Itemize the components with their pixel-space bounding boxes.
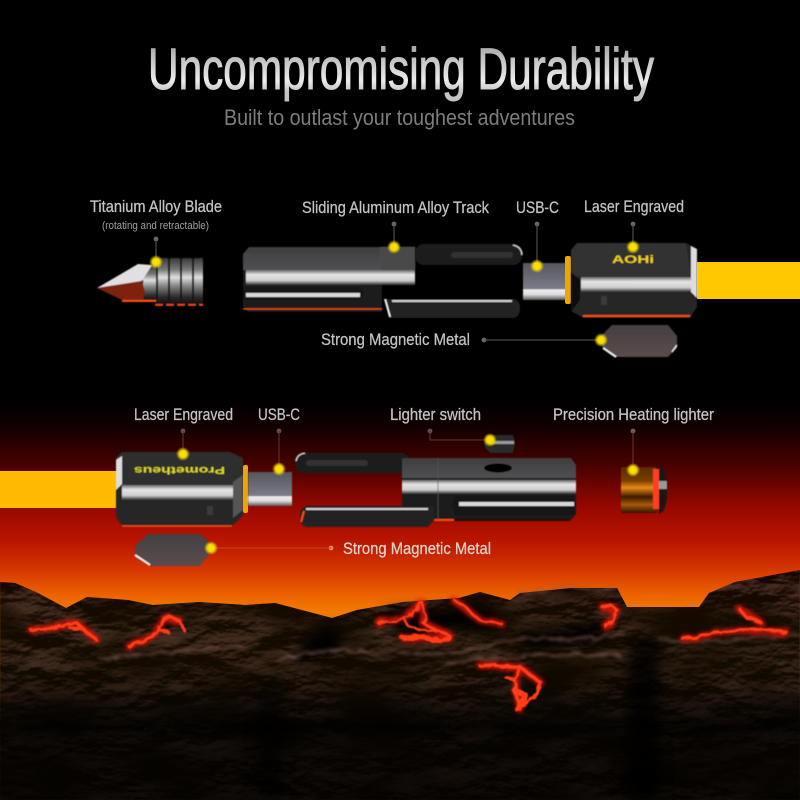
main body bbox=[243, 247, 415, 312]
callout: titanium alloy blade: (rotating and retractable) bbox=[102, 220, 209, 232]
USB-C plug bbox=[248, 472, 292, 506]
callout: lighter switch bbox=[390, 405, 497, 447]
callout: sliding track bbox=[302, 198, 489, 254]
cable: top yellow bbox=[697, 262, 800, 299]
yellow collar bbox=[243, 465, 248, 513]
magnet plate bottom bbox=[135, 534, 212, 566]
callout: USB-C top: USB-C bbox=[516, 198, 559, 217]
callout: USB-C bottom bbox=[258, 405, 300, 476]
callout: magnetic metal top: Strong Magnetic Metal bbox=[321, 330, 470, 349]
callout: lighter switch: Lighter switch bbox=[390, 405, 481, 424]
callout: precision heating lighter bbox=[553, 405, 714, 477]
magnet plate top bbox=[600, 325, 677, 357]
Prometheus connector housing bbox=[116, 452, 243, 526]
yellow collar bbox=[565, 256, 571, 304]
callout: USB-C top bbox=[516, 198, 559, 273]
upper sliding track bbox=[415, 244, 522, 265]
top exploded device bbox=[97, 243, 800, 357]
rock ledges bbox=[100, 588, 800, 665]
callout: USB-C bottom: USB-C bbox=[258, 405, 300, 424]
lower sliding track bbox=[300, 506, 434, 527]
callout: sliding track: Sliding Aluminum Alloy Track bbox=[302, 198, 489, 217]
blade head bbox=[97, 258, 203, 305]
bottom exploded device bbox=[0, 435, 667, 566]
subtitle: Built to outlast your toughest adventures bbox=[224, 105, 575, 130]
callout: magnetic metal bottom: Strong Magnetic Metal bbox=[343, 539, 491, 558]
callout: laser engraved top: Laser Engraved bbox=[584, 197, 684, 216]
callout: laser engraved bottom: Laser Engraved bbox=[134, 405, 233, 424]
callout: titanium alloy blade: Titanium Alloy Blade bbox=[90, 197, 222, 216]
lighter switch part bbox=[484, 435, 515, 453]
upper sliding track bbox=[295, 453, 410, 473]
USB-C plug bbox=[523, 263, 566, 300]
AOHi connector housing bbox=[571, 243, 697, 318]
lower sliding track bbox=[385, 299, 520, 318]
callout: precision heating lighter: Precision Heating lighter bbox=[553, 405, 714, 424]
callout: titanium alloy blade bbox=[90, 197, 222, 269]
callout: magnetic metal top bbox=[321, 330, 608, 349]
logo text: AOHi: AOHi bbox=[612, 254, 654, 266]
heating lighter part bbox=[621, 466, 667, 514]
main body bbox=[402, 458, 576, 520]
callout: laser engraved top bbox=[584, 197, 684, 254]
lava rock landscape bbox=[0, 570, 800, 800]
callout: laser engraved bottom bbox=[134, 405, 233, 461]
logo text: Prometheus (upside down): Prometheus bbox=[133, 464, 225, 475]
cable: bottom yellow bbox=[0, 471, 117, 508]
callout: magnetic metal bottom bbox=[204, 539, 491, 558]
